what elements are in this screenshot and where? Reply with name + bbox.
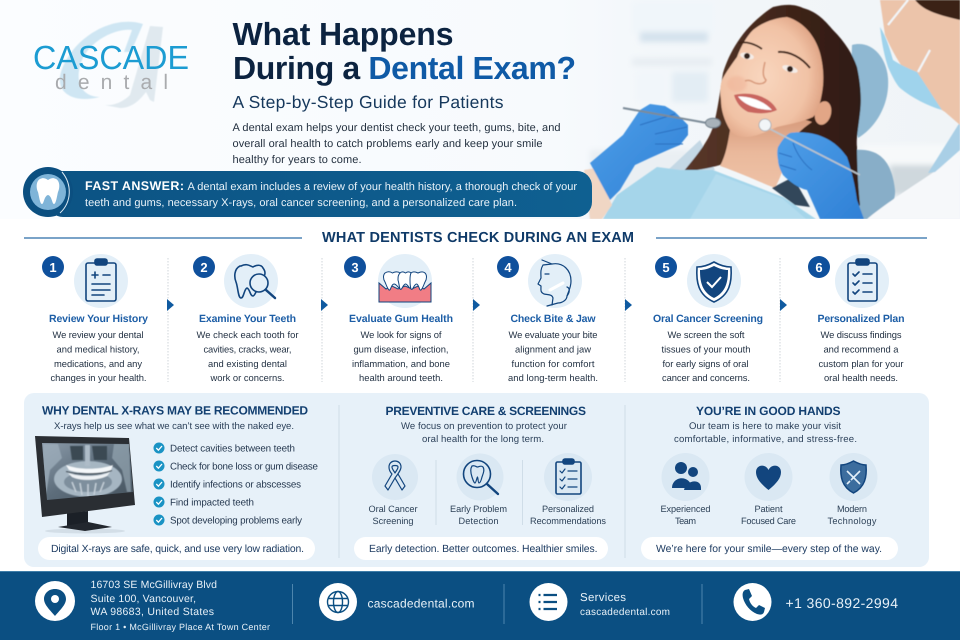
callout pill	[641, 537, 898, 560]
step description: and long-term health.	[508, 372, 598, 383]
smile	[734, 94, 777, 113]
icon: monitor with dental x-ray	[35, 436, 135, 534]
step arrows	[167, 299, 787, 311]
step title: Personalized Plan	[818, 313, 904, 325]
left glove	[590, 104, 688, 200]
step 2: examine your teeth: 2	[200, 260, 208, 275]
address	[35, 579, 270, 632]
callout pill	[38, 537, 315, 560]
item: modern technology: Technology	[828, 516, 877, 526]
step 6: personalized plan: 6	[815, 260, 823, 275]
step description: We discuss findings	[820, 329, 902, 340]
phone: +1 360-892-2994	[786, 595, 898, 611]
tooth badge	[23, 167, 73, 217]
icon: clipboard	[86, 259, 116, 301]
services: Services	[580, 592, 626, 604]
dentist coat	[866, 167, 944, 219]
panel intro	[674, 421, 857, 445]
left arm	[584, 168, 612, 219]
checklist of x-ray benefits: Spot developing problems early	[170, 516, 302, 526]
icon: gums and teeth	[379, 272, 431, 302]
footer	[0, 571, 960, 640]
panel: why dental x-rays	[35, 404, 319, 560]
right instrument	[759, 119, 860, 175]
item: modern technology: Modern	[837, 504, 867, 514]
item: patient focused care	[741, 453, 796, 526]
fast answer banner	[23, 167, 592, 217]
panel intro: We focus on prevention to protect your	[401, 421, 568, 432]
address: WA 98683, United States	[90, 606, 214, 618]
step 5: oral cancer screening: 5	[662, 260, 670, 275]
step title: Oral Cancer Screening	[653, 313, 763, 325]
address: Floor 1 • McGillivray Place At Town Center	[90, 622, 270, 632]
step 5: oral cancer screening	[653, 254, 763, 383]
item: modern technology	[828, 453, 878, 526]
step description	[196, 329, 298, 383]
step description: cavities, cracks, wear,	[204, 344, 292, 354]
website: cascadedental.com	[368, 596, 474, 610]
step description: We screen the soft	[668, 329, 745, 340]
dentist head	[880, 0, 960, 125]
title	[232, 16, 576, 86]
phone	[734, 583, 898, 621]
intro paragraph: healthy for years to come.	[232, 154, 362, 166]
step description: function for comfort	[512, 358, 595, 369]
step description: for early signs of oral	[662, 358, 748, 369]
step description: and recommend a	[824, 344, 899, 354]
panel heading: WHY DENTAL X-RAYS MAY BE RECOMMENDED	[42, 404, 308, 418]
hair	[684, 5, 861, 219]
dentist mask	[880, 27, 942, 110]
item: patient focused care: Focused Care	[741, 516, 796, 526]
step description: custom plan for your	[818, 358, 904, 369]
step 2: examine your teeth	[193, 254, 298, 383]
item: early problem detection	[450, 454, 507, 526]
callout pill: Digital X-rays are safe, quick, and use very low radiation.	[51, 544, 304, 555]
cheek blush	[728, 76, 746, 92]
step 4: check bite and jaw	[497, 254, 598, 383]
fast answer text: FAST ANSWER:	[85, 179, 184, 193]
step description: gum disease, infection,	[354, 344, 448, 354]
title: During a Dental Exam?	[233, 50, 576, 86]
logo: Cascade Dental	[33, 22, 189, 108]
logo watermark	[60, 22, 163, 108]
logo subtitle: dental	[55, 71, 168, 94]
step description: and existing dental	[208, 358, 287, 369]
step description: We check each tooth for	[196, 329, 298, 340]
step description	[662, 329, 750, 383]
panel intro: comfortable, informative, and stress-free.	[674, 434, 857, 445]
icon: checklist clipboard	[848, 259, 877, 301]
intro paragraph: A dental exam helps your dentist check your teeth, gums, bite, and	[232, 122, 560, 134]
icon: head profile	[538, 260, 571, 306]
item: experienced team: Experienced	[660, 504, 710, 514]
services: cascadedental.com	[580, 607, 670, 618]
top under bib	[772, 177, 810, 207]
intro paragraph	[232, 122, 560, 166]
step 6: personalized plan	[808, 254, 904, 383]
step description: We look for signs of	[360, 329, 442, 340]
checklist of x-ray benefits: Identify infections or abscesses	[170, 480, 301, 490]
neck	[720, 118, 812, 188]
step description: tissues of your mouth	[662, 344, 750, 354]
logo wordmark: CASCADE	[33, 40, 189, 77]
step title: Examine Your Teeth	[199, 313, 296, 325]
face	[720, 17, 823, 137]
step 1: review your history	[42, 254, 148, 383]
item: personalized recommendations: Recommendations	[530, 516, 606, 526]
step description: inflammation, and bone	[352, 358, 450, 369]
step description	[818, 329, 904, 383]
item: experienced team: Team	[675, 516, 696, 526]
x-ray image detail	[43, 444, 131, 497]
subtitle: A Step-by-Step Guide for Patients	[232, 92, 504, 112]
item: oral cancer screening	[368, 454, 418, 526]
fast answer text: A dental exam includes a review of your health history, a thorough check of your	[188, 181, 577, 193]
dentist collar	[928, 122, 960, 173]
panel heading: PREVENTIVE CARE & SCREENINGS	[386, 404, 586, 418]
fast answer text: teeth and gums, necessary X-rays, oral cancer screening, and a personalized care plan.	[85, 197, 517, 209]
step description: work or concerns.	[210, 372, 284, 383]
checklist of x-ray benefits: Find impacted teeth	[170, 498, 254, 508]
photo: patient in dental chair with dentist	[584, 0, 960, 219]
panel: you're in good hands	[641, 404, 898, 560]
step description: alignment and jaw	[515, 344, 591, 354]
header background	[0, 0, 960, 219]
panel intro: X-rays help us see what we can’t see with the naked eye.	[54, 421, 294, 432]
left instrument	[623, 108, 720, 128]
clinic background	[592, 30, 933, 202]
step title: Evaluate Gum Health	[349, 313, 453, 325]
callout pill	[354, 537, 608, 560]
icon: tooth and magnifier	[235, 265, 275, 298]
item: experienced team	[660, 453, 710, 526]
section heading: WHAT DENTISTS CHECK DURING AN EXAM	[322, 230, 634, 246]
eyebrows	[739, 42, 762, 49]
step description: oral health needs.	[824, 372, 898, 383]
item: patient focused care: Patient	[754, 504, 783, 514]
step description	[352, 329, 450, 383]
address: 16703 SE McGillivray Blvd	[90, 579, 217, 591]
callout pill: We’re here for your smile—every step of the way.	[656, 544, 882, 555]
step description: cancer and concerns.	[662, 372, 750, 383]
panel heading: YOU’RE IN GOOD HANDS	[696, 404, 840, 418]
checklist of x-ray benefits: Check for bone loss or gum disease	[170, 462, 319, 472]
dentist hair	[914, 0, 960, 20]
item: personalized recommendations	[530, 453, 606, 526]
panel: preventive care and screenings	[354, 404, 608, 560]
step description: and medical history,	[56, 344, 140, 354]
step 3: evaluate gum health: 3	[351, 260, 359, 275]
step description: We evaluate your bite	[508, 329, 598, 340]
lower info panel background	[24, 393, 929, 567]
eyes	[740, 52, 754, 60]
item: personalized recommendations: Personalized	[542, 504, 594, 514]
ear	[814, 100, 832, 126]
right glove	[777, 132, 864, 219]
nose	[745, 62, 766, 84]
step description: health around teeth.	[359, 372, 443, 383]
step description: medications, and any	[54, 358, 142, 369]
checklist of x-ray benefits	[154, 442, 319, 526]
step description	[508, 329, 598, 383]
step description: changes in your health.	[50, 372, 146, 383]
fast answer text	[85, 179, 577, 209]
intro paragraph: overall oral health to catch problems early and keep your smile	[232, 138, 542, 150]
dental chair	[668, 44, 895, 219]
step 4: check bite and jaw: 4	[504, 260, 512, 275]
item: early problem detection: Early Problem	[450, 504, 507, 514]
panel intro: Our team is here to make your visit	[689, 421, 841, 432]
address: Suite 100, Vancouver,	[90, 593, 196, 605]
step description	[50, 329, 146, 383]
services	[530, 583, 670, 621]
callout pill: Early detection. Better outcomes. Healthier smiles.	[369, 544, 598, 555]
bib	[603, 167, 816, 219]
title: What Happens	[232, 16, 454, 52]
step title: Review Your History	[49, 313, 148, 325]
icon: shield with check	[697, 262, 731, 302]
item: oral cancer screening: Screening	[372, 516, 414, 526]
step title: Check Bite & Jaw	[510, 313, 596, 325]
panel intro: oral health for the long term.	[422, 434, 544, 445]
step 1: review your history: 1	[49, 260, 57, 275]
panel intro	[401, 421, 568, 445]
item: early problem detection: Detection	[458, 516, 498, 526]
item: oral cancer screening: Oral Cancer	[368, 504, 418, 514]
step 3: evaluate gum health	[344, 254, 453, 383]
website	[319, 583, 474, 621]
step description: We review your dental	[52, 329, 144, 340]
checklist of x-ray benefits: Detect cavities between teeth	[170, 444, 295, 454]
